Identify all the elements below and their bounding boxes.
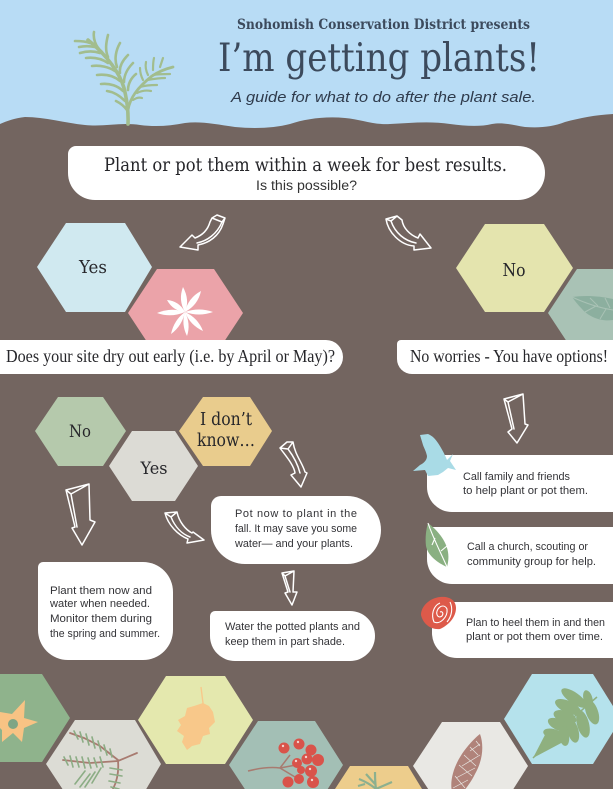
panel: main question: Is this possible?	[256, 178, 357, 193]
panel: dry site question	[0, 340, 343, 374]
panel: plant now: water when needed.	[49, 598, 150, 610]
icon: blue butterfly	[413, 434, 456, 476]
panel: heel them in	[432, 602, 613, 658]
hexagon: orange with sprig	[335, 766, 422, 789]
icon: orange star flower	[0, 700, 38, 742]
panel: pot now	[211, 496, 381, 564]
hexagon: I don't know	[179, 397, 272, 466]
hexagon: yes (dry site)	[109, 431, 198, 501]
panel: no worries	[397, 340, 613, 374]
panel: main question: Plant or pot them within a week for best results.	[104, 154, 507, 176]
hexagon: no: No	[502, 260, 526, 281]
icon: fern	[533, 685, 602, 758]
header text	[218, 17, 540, 106]
title: I’m getting plants!	[218, 36, 540, 81]
hexagon row: bottom decoration	[0, 674, 613, 789]
hexagon: fern	[504, 674, 613, 764]
arrow: to options	[504, 394, 528, 443]
hexagon: no	[456, 224, 573, 312]
panel: main question	[68, 146, 545, 200]
panel: call a church: community group for help.	[467, 556, 596, 568]
hexagon: yes (dry site): Yes	[140, 459, 168, 479]
panel: water the potted plants: keep them in part shade.	[225, 636, 345, 648]
subtitle: A guide for what to do after the plant sale.	[230, 89, 536, 106]
icon: red rose	[421, 597, 456, 629]
panel: call family: Call family and friends	[463, 471, 570, 483]
icon: white flower	[157, 287, 213, 336]
panel: call a church	[427, 527, 613, 584]
hexagon: no (dry site): No	[69, 422, 91, 442]
hexagon: yes: Yes	[78, 257, 107, 278]
panel: call a church: Call a church, scouting or	[467, 541, 588, 553]
panel: call family	[427, 455, 613, 512]
icon: leaf	[572, 296, 613, 320]
arrow: don't know to pot	[280, 442, 307, 487]
hexagon: pink with white flower	[128, 269, 243, 357]
arrow: to yes	[180, 215, 225, 250]
hexagon: I don't know: know…	[197, 431, 255, 451]
panel: heel them in: Plan to heel them in and then	[466, 617, 605, 629]
panel: pot now: water— and your plants.	[234, 538, 353, 550]
icon: conifer branch	[63, 731, 137, 789]
hexagon: autumn leaf	[138, 676, 253, 764]
sky with wavy soil edge	[0, 0, 613, 128]
arrow: to no	[386, 216, 431, 250]
panel: call family: to help plant or pot them.	[463, 485, 588, 497]
arrow: yes to pot	[165, 512, 204, 543]
panel: plant now	[38, 562, 173, 660]
hexagon: pine cone	[413, 722, 528, 789]
hexagon: yes	[37, 223, 152, 312]
arrow: pot to water	[282, 571, 297, 605]
icon: pine cone	[451, 734, 482, 789]
panel: water the potted plants	[210, 611, 375, 661]
arrow: no to plant now	[66, 484, 95, 545]
icon: berry branch	[248, 738, 324, 788]
hexagon: green with leaf	[548, 269, 613, 357]
hexagon: I don't know: I don’t	[200, 410, 252, 430]
hexagon: star flower	[0, 674, 70, 762]
icon: green sprig	[358, 772, 392, 789]
hexagon: red berries	[229, 721, 343, 789]
icon: green sprout	[75, 32, 173, 124]
panel: plant now: the spring and summer.	[50, 628, 160, 640]
panel: plant now: Monitor them during	[50, 613, 152, 625]
presenter line: Snohomish Conservation District presents	[237, 17, 530, 33]
panel: pot now: fall. It may save you some	[235, 523, 357, 535]
panel: water the potted plants: Water the potted plants and	[225, 621, 360, 633]
icon: green leaf	[426, 523, 448, 567]
hexagon: conifer branch	[46, 720, 161, 789]
panel: pot now: Pot now to plant in the	[235, 508, 357, 520]
hexagon: no (dry site)	[35, 397, 126, 466]
panel: heel them in: plant or pot them over time.	[466, 631, 603, 643]
panel: plant now: Plant them now and	[50, 585, 152, 597]
icon: orange oak leaf	[177, 687, 215, 750]
panel: dry site question: Does your site dry out early (i.e. by April or May)?	[6, 346, 335, 366]
